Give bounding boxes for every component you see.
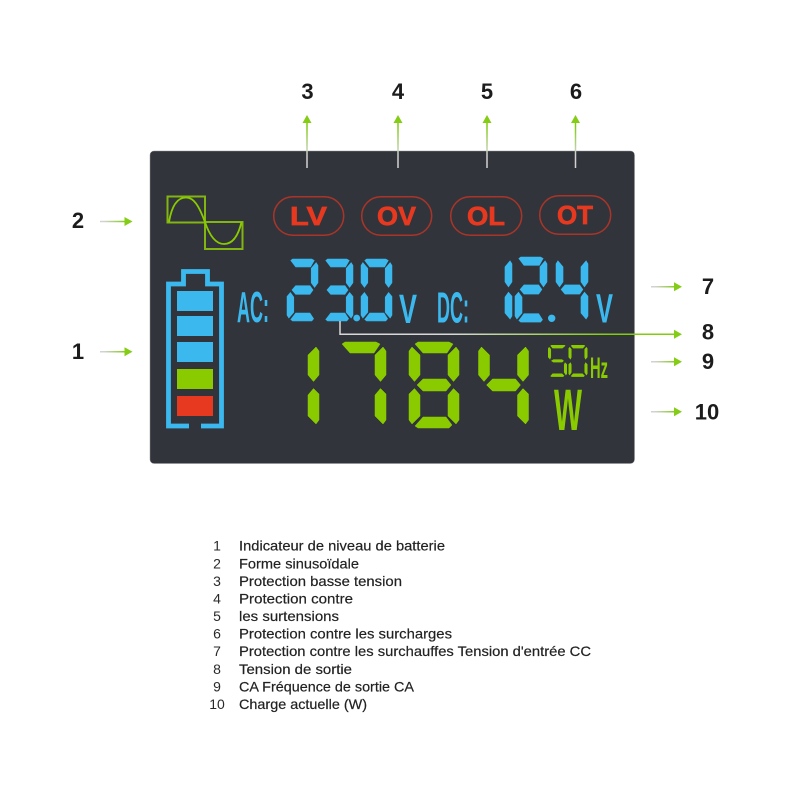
- readout: DC voltage 12.4 V: [505, 257, 613, 332]
- callout numbers: 8: [702, 320, 714, 344]
- legend text: Charge actuelle (W): [239, 696, 367, 712]
- panel: LCD display: DC:: [437, 284, 469, 332]
- callout numbers: 7: [702, 274, 714, 299]
- legend numbers: 3: [213, 573, 221, 589]
- arrow: callout 4: [394, 115, 402, 168]
- panel: LCD display: [150, 151, 634, 464]
- arrow: callout 1: [100, 347, 132, 356]
- legend text: Indicateur de niveau de batterie: [239, 538, 445, 554]
- legend text: Forme sinusoïdale: [239, 555, 359, 571]
- legend numbers: 10: [209, 696, 225, 712]
- callout numbers: 6: [570, 79, 582, 104]
- arrow: callout 8: [340, 321, 682, 339]
- legend text: Protection contre: [239, 590, 353, 606]
- arrow: callout 9: [651, 357, 682, 366]
- badge: OL: OL: [467, 201, 505, 231]
- callout numbers: 4: [392, 79, 405, 104]
- panel: LCD display: Hz: [590, 352, 608, 385]
- arrow: callout 3: [302, 115, 312, 168]
- callout numbers: 3: [301, 79, 314, 104]
- legend text: [239, 538, 591, 712]
- legend numbers: [209, 538, 225, 712]
- readout: AC voltage 23.0 V: V: [399, 286, 417, 332]
- legend numbers: 6: [213, 626, 221, 642]
- legend numbers: 4: [213, 590, 221, 606]
- legend numbers: 8: [213, 661, 221, 677]
- callout numbers: 2: [72, 208, 84, 233]
- panel: LCD display: AC:: [237, 283, 269, 332]
- badge: OL: [451, 197, 522, 235]
- callout numbers: 1: [72, 339, 84, 364]
- callout numbers: 10: [695, 400, 719, 424]
- legend text: Tension de sortie: [239, 661, 352, 677]
- legend text: les surtensions: [239, 608, 339, 624]
- readout: frequency 50 Hz: [548, 345, 608, 385]
- legend text: CA Fréquence de sortie CA: [239, 678, 415, 694]
- badge: LV: [274, 197, 344, 235]
- badge: OT: [540, 196, 611, 234]
- badge: OV: [362, 197, 432, 235]
- legend text: Protection basse tension: [239, 573, 402, 589]
- badge: OT: OT: [557, 200, 593, 230]
- arrow: callout 7: [651, 282, 682, 291]
- label: W unit: W: [554, 378, 582, 443]
- readout: DC voltage 12.4 V: V: [596, 286, 613, 332]
- badge: OV: OV: [377, 201, 417, 231]
- legend numbers: 9: [213, 678, 221, 694]
- badge: LV: LV: [290, 201, 328, 231]
- readout: load 1784 W: [308, 342, 528, 428]
- icon: sine wave: [168, 196, 242, 249]
- readout: AC voltage 23.0 V: [287, 259, 417, 332]
- callout numbers: [72, 79, 719, 424]
- legend text: Protection contre les surcharges: [239, 626, 452, 642]
- legend numbers: 5: [213, 608, 221, 624]
- callout numbers: 5: [481, 79, 493, 104]
- icon: battery level: [168, 272, 222, 426]
- callout numbers: 9: [702, 349, 714, 374]
- arrow: callout 6: [571, 115, 580, 168]
- arrow: callout 5: [482, 115, 492, 168]
- legend text: Protection contre les surchauffes Tension d'entrée CC: [239, 643, 591, 659]
- legend numbers: 2: [213, 555, 221, 571]
- arrow: callout 2: [100, 217, 132, 226]
- arrow: callout 10: [651, 407, 682, 416]
- legend numbers: 7: [213, 643, 221, 659]
- legend numbers: 1: [213, 538, 221, 554]
